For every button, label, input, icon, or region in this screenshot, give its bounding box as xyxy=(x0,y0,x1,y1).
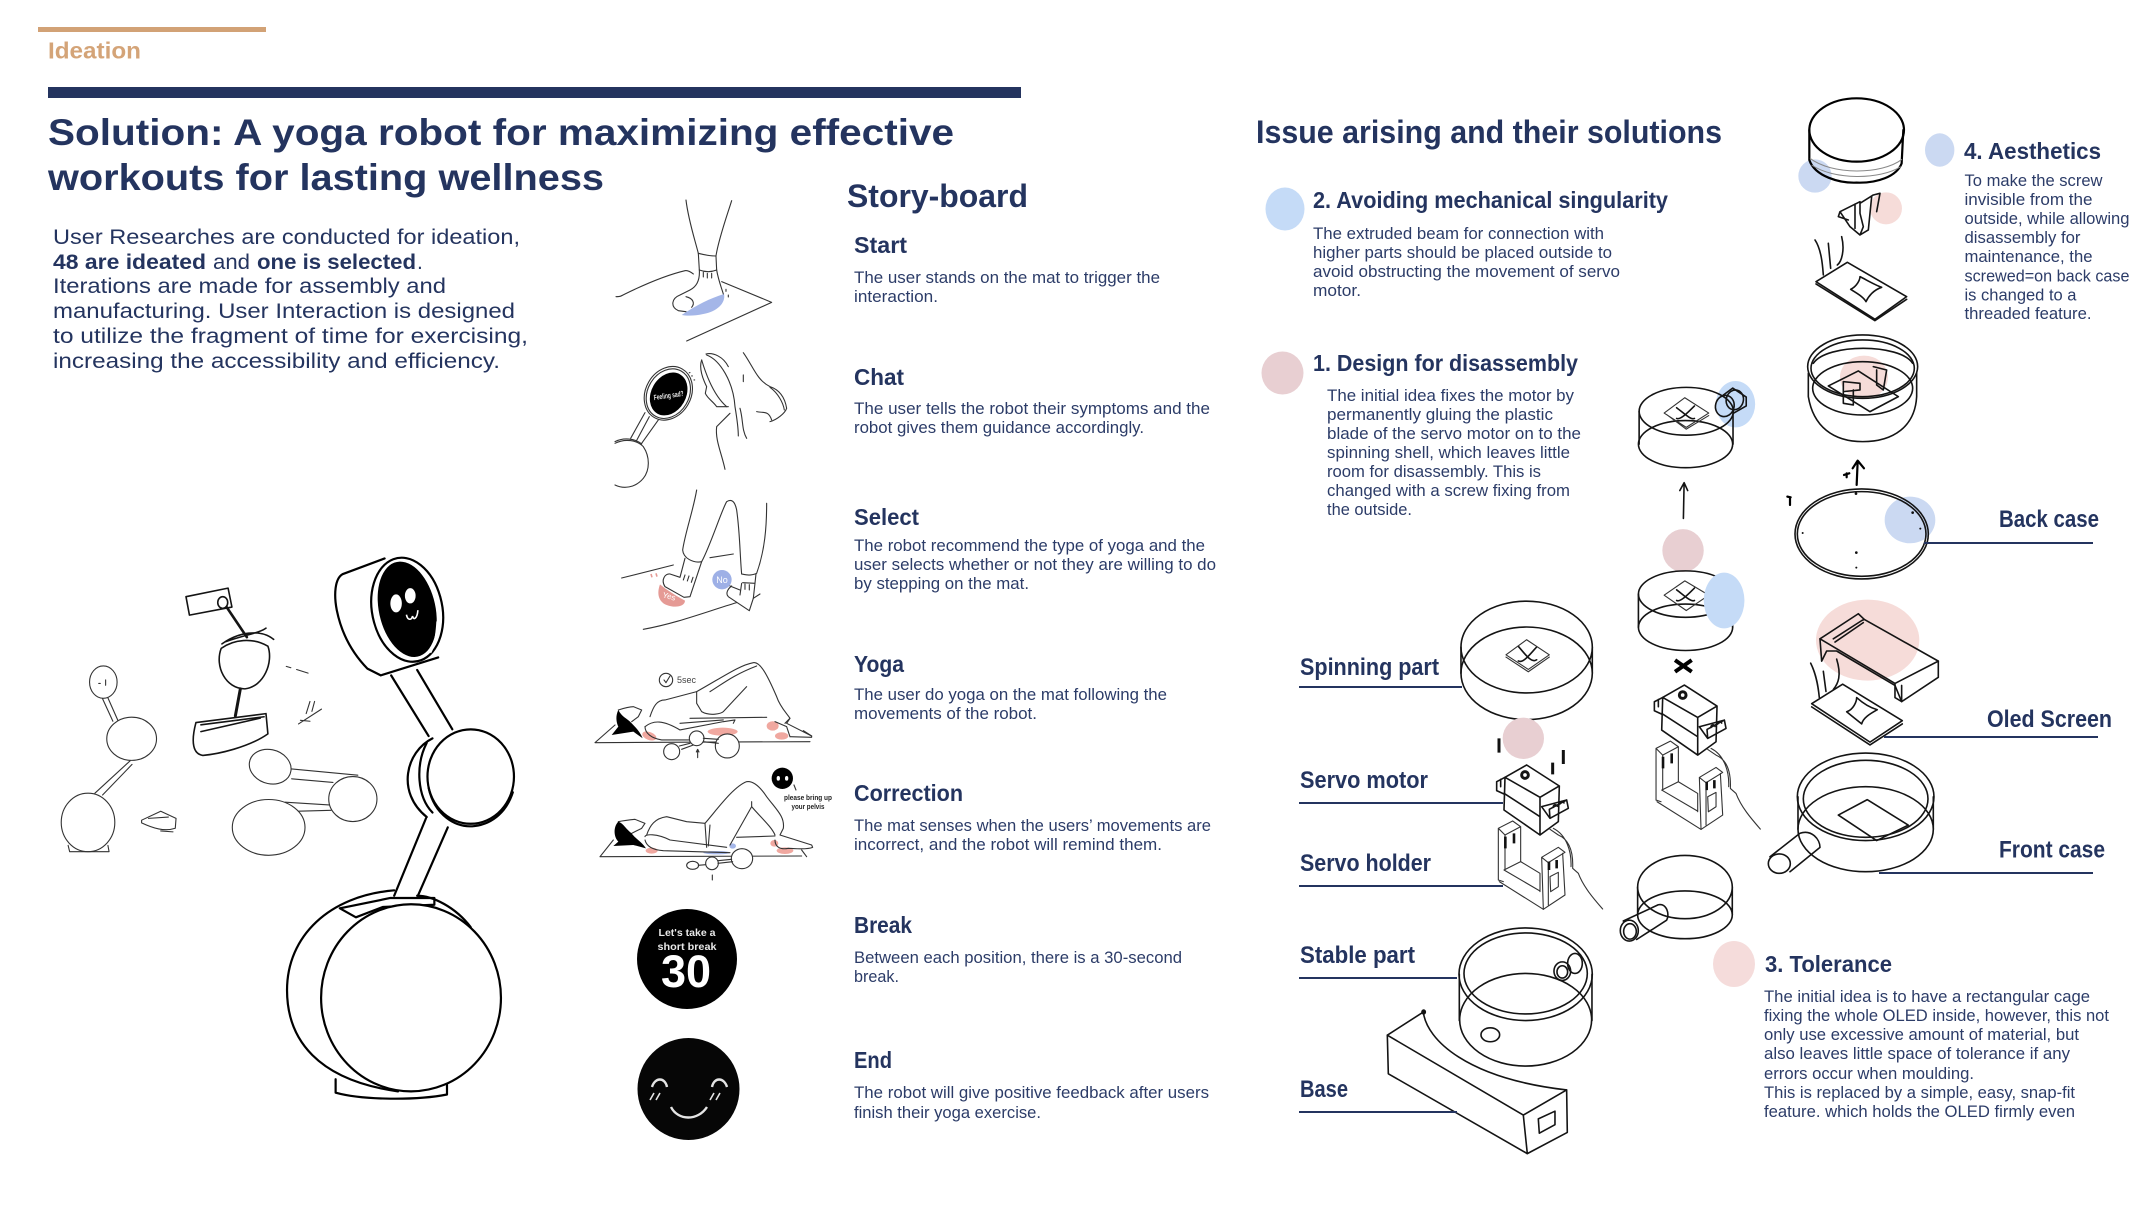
step: yoga text: Yoga xyxy=(854,651,904,677)
icon: break countdown screen xyxy=(637,909,737,1009)
intro text block: increasing the accessibility and efficiency. xyxy=(53,350,500,373)
step: end text: The robot will give positive feedback after users xyxy=(854,1083,1209,1102)
step: break text: Break xyxy=(854,912,912,938)
label: back case: Back case xyxy=(1999,506,2099,533)
label: oled screen: Oled Screen xyxy=(1987,706,2112,733)
issue 1 text: changed with a screw fixing from xyxy=(1327,481,1570,500)
step: yoga text xyxy=(854,651,1167,723)
label: base: Base xyxy=(1300,1076,1348,1103)
intro text block: User Researches are conducted for ideation, xyxy=(53,226,520,249)
step: chat text: robot gives them guidance accordingly. xyxy=(854,418,1144,437)
issue 2 text xyxy=(1313,187,1668,300)
illustration: front case xyxy=(1768,753,1934,873)
blob: blue marker for issue 2 xyxy=(1266,188,1304,230)
illustration: yoga pose following the robot: 5sec xyxy=(677,675,696,685)
illustration: revised servo column xyxy=(1654,660,1760,829)
issue 3 text: fixing the whole OLED inside, however, this not xyxy=(1764,1006,2109,1025)
step: start text: interaction. xyxy=(854,287,938,306)
issue 2 text: higher parts should be placed outside to xyxy=(1313,243,1612,262)
issue 4 text: is changed to a xyxy=(1964,286,2077,304)
issue 1 text: the outside. xyxy=(1327,500,1412,519)
step: end text: finish their yoga exercise. xyxy=(854,1103,1041,1122)
intro text block: . xyxy=(417,251,423,274)
illustration: original exploded assembly with labels xyxy=(1299,601,1603,1154)
illustration: revised spinning shell with arrow xyxy=(1638,381,1755,518)
step: correction text: Correction xyxy=(854,780,963,806)
illustration: chat with the robot xyxy=(615,353,787,487)
blob: blue marker for issue 4 xyxy=(1925,133,1954,167)
section tag: Ideation xyxy=(38,27,266,64)
header bar xyxy=(48,87,1021,98)
intro text block xyxy=(53,226,528,373)
heading: issue arising: Issue arising and their solutions xyxy=(1256,114,1722,150)
issue 4 text: disassembly for xyxy=(1964,228,2081,247)
step: yoga text: The user do yoga on the mat following the xyxy=(854,685,1167,704)
illustration: concept sketches xyxy=(61,588,377,855)
issue 2 text: 2. Avoiding mechanical singularity xyxy=(1313,187,1668,213)
panel: story-board xyxy=(847,178,1216,1122)
step: start text: The user stands on the mat to trigger the xyxy=(854,268,1160,287)
icon: break countdown screen: short break xyxy=(658,941,717,953)
blob: pink marker for issue 1 xyxy=(1262,352,1304,394)
label: servo motor: Servo motor xyxy=(1300,767,1428,794)
icon: happy face screen xyxy=(638,1038,740,1140)
illustration: yoga pose following the robot xyxy=(595,663,812,760)
panel: issues and solutions xyxy=(1256,114,2130,1121)
illustration: correction reminder: your pelvis xyxy=(792,802,824,811)
step: break text: break. xyxy=(854,967,899,986)
step: correction text xyxy=(854,780,1211,854)
step: chat text: Chat xyxy=(854,364,904,390)
step: correction text: incorrect, and the robot will remind them. xyxy=(854,835,1162,854)
illustration: correction reminder: please bring up xyxy=(784,793,832,802)
section tag: Ideation: Ideation xyxy=(48,38,141,64)
step: end text xyxy=(854,1047,1209,1122)
illustration: aesthetics exploded parts xyxy=(1787,98,1935,579)
illustration: select yes or no: Yes xyxy=(662,590,677,603)
illustration: select yes or no: No xyxy=(716,575,728,585)
step: select text: user selects whether or not they are willing to do xyxy=(854,555,1216,574)
issue 1 text: room for disassembly. This is xyxy=(1327,462,1541,481)
step: chat text xyxy=(854,364,1210,437)
step: start text: Start xyxy=(854,232,907,258)
issue 3 text xyxy=(1764,951,2109,1121)
spinning part xyxy=(1461,601,1592,720)
label: spinning part: Spinning part xyxy=(1300,654,1439,681)
step: chat text: The user tells the robot their symptoms and the xyxy=(854,399,1210,418)
intro text block: to utilize the fragment of time for exercising, xyxy=(53,325,528,348)
issue 4 text: 4. Aesthetics xyxy=(1964,138,2101,164)
step: break text: Between each position, there is a 30-second xyxy=(854,948,1182,967)
title: Solution: A yoga robot for maximizing effective xyxy=(48,112,954,153)
issue 1 text: blade of the servo motor on to the xyxy=(1327,424,1581,443)
intro text block: 48 are ideated xyxy=(53,251,206,274)
label: stable part: Stable part xyxy=(1300,942,1415,969)
step: start text xyxy=(854,232,1160,306)
step: select text: by stepping on the mat. xyxy=(854,574,1029,593)
illustration: final robot drawing xyxy=(287,547,514,1099)
illustration: chat with the robot: Feeling sad? xyxy=(653,389,684,402)
issue 4 text: To make the screw xyxy=(1964,171,2103,190)
illustration: open cylinder with tube xyxy=(1620,855,1732,941)
step: yoga text: movements of the robot. xyxy=(854,704,1037,723)
step: correction text: The mat senses when the users’ movements are xyxy=(854,816,1211,835)
issue 1 text: The initial idea fixes the motor by xyxy=(1327,386,1574,405)
issue 2 text: The extruded beam for connection with xyxy=(1313,224,1604,243)
issue 3 text: This is replaced by a simple, easy, snap-fit xyxy=(1764,1083,2075,1102)
intro text block: and xyxy=(213,251,250,274)
issue 1 text xyxy=(1313,350,1581,519)
illustration: OLED screen and bracket xyxy=(1811,600,1938,745)
illustration: start, foot on mat xyxy=(616,200,772,341)
step: end text: End xyxy=(854,1047,892,1073)
issue 4 text: invisible from the xyxy=(1964,190,2092,209)
intro text block: one is selected xyxy=(257,251,416,274)
issue 3 text: feature. which holds the OLED firmly even xyxy=(1764,1102,2075,1121)
issue 3 text: only use excessive amount of material, but xyxy=(1764,1025,2079,1044)
intro text block: manufacturing. User Interaction is designed xyxy=(53,300,515,323)
icon: break countdown screen: Let's take a xyxy=(658,927,716,939)
illustration: select yes or no xyxy=(622,490,767,629)
step: select text xyxy=(854,504,1216,593)
illustration: middle shell with blobs xyxy=(1638,529,1744,650)
issue 1 text: spinning shell, which leaves little xyxy=(1327,443,1570,462)
issue 4 text: screwed=on back case xyxy=(1964,266,2130,286)
issue 4 text: threaded feature. xyxy=(1964,304,2092,323)
issue 3 text: also leaves little space of tolerance if any xyxy=(1764,1044,2070,1063)
issue 3 text: errors occur when moulding. xyxy=(1764,1064,1974,1083)
title xyxy=(47,112,954,198)
icon: break countdown screen: 30 xyxy=(661,946,711,997)
issue 1 text: permanently gluing the plastic xyxy=(1327,405,1553,424)
issue 1 text: 1. Design for disassembly xyxy=(1313,350,1578,376)
step: select text: The robot recommend the type of yoga and the xyxy=(854,536,1205,555)
stable part and base xyxy=(1387,928,1592,1154)
issue 3 text: The initial idea is to have a rectangular cage xyxy=(1764,987,2090,1006)
blob: pink marker for issue 3 xyxy=(1713,941,1755,987)
title: workouts for lasting wellness xyxy=(47,157,604,198)
issue 4 text: maintenance, the xyxy=(1964,247,2092,266)
label: front case: Front case xyxy=(1999,836,2105,864)
heading: story-board: Story-board xyxy=(847,178,1028,214)
label: servo holder: Servo holder xyxy=(1300,850,1431,877)
intro text block: Iterations are made for assembly and xyxy=(53,275,446,298)
issue 2 text: motor. xyxy=(1313,281,1361,300)
step: select text: Select xyxy=(854,504,919,530)
issue 3 text: 3. Tolerance xyxy=(1765,951,1892,977)
illustration: correction reminder xyxy=(600,768,832,880)
step: break text xyxy=(854,912,1182,986)
screws, servo and holder xyxy=(1497,718,1603,909)
issue 4 text: outside, while allowing xyxy=(1964,209,2130,228)
issue 4 text xyxy=(1964,138,2130,323)
issue 2 text: avoid obstructing the movement of servo xyxy=(1313,262,1620,281)
